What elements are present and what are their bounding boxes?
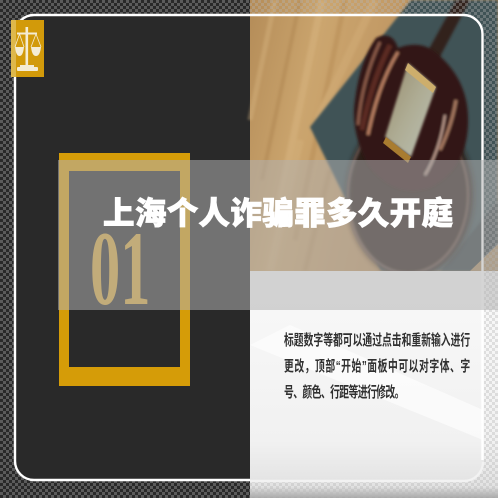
body text: 更改，顶部“开始”面板中可以对字体、字 (284, 357, 470, 375)
body text: 标题数字等都可以通过点击和重新输入进行 (284, 331, 470, 349)
gavel: head (354, 36, 468, 191)
decorative light facets (250, 325, 483, 440)
book: slate block under the gavel (310, 0, 498, 271)
panel: wood table photo (250, 0, 498, 277)
gavel: sounding block (347, 113, 473, 277)
panel: white text panel (250, 271, 498, 498)
number frame (59, 153, 190, 386)
body text: 号、颜色、行距等进行修改。 (284, 383, 404, 401)
translucent title band (58, 160, 498, 310)
title: 上海个人诈骗罪多久开庭 (103, 195, 453, 231)
number 01: 01 (90, 209, 150, 327)
body text (284, 331, 470, 401)
gavel: handle (424, 0, 470, 66)
panel: dark left background (0, 0, 250, 498)
gavel: silver band (385, 63, 436, 157)
icon: justice scales badge (11, 20, 44, 77)
